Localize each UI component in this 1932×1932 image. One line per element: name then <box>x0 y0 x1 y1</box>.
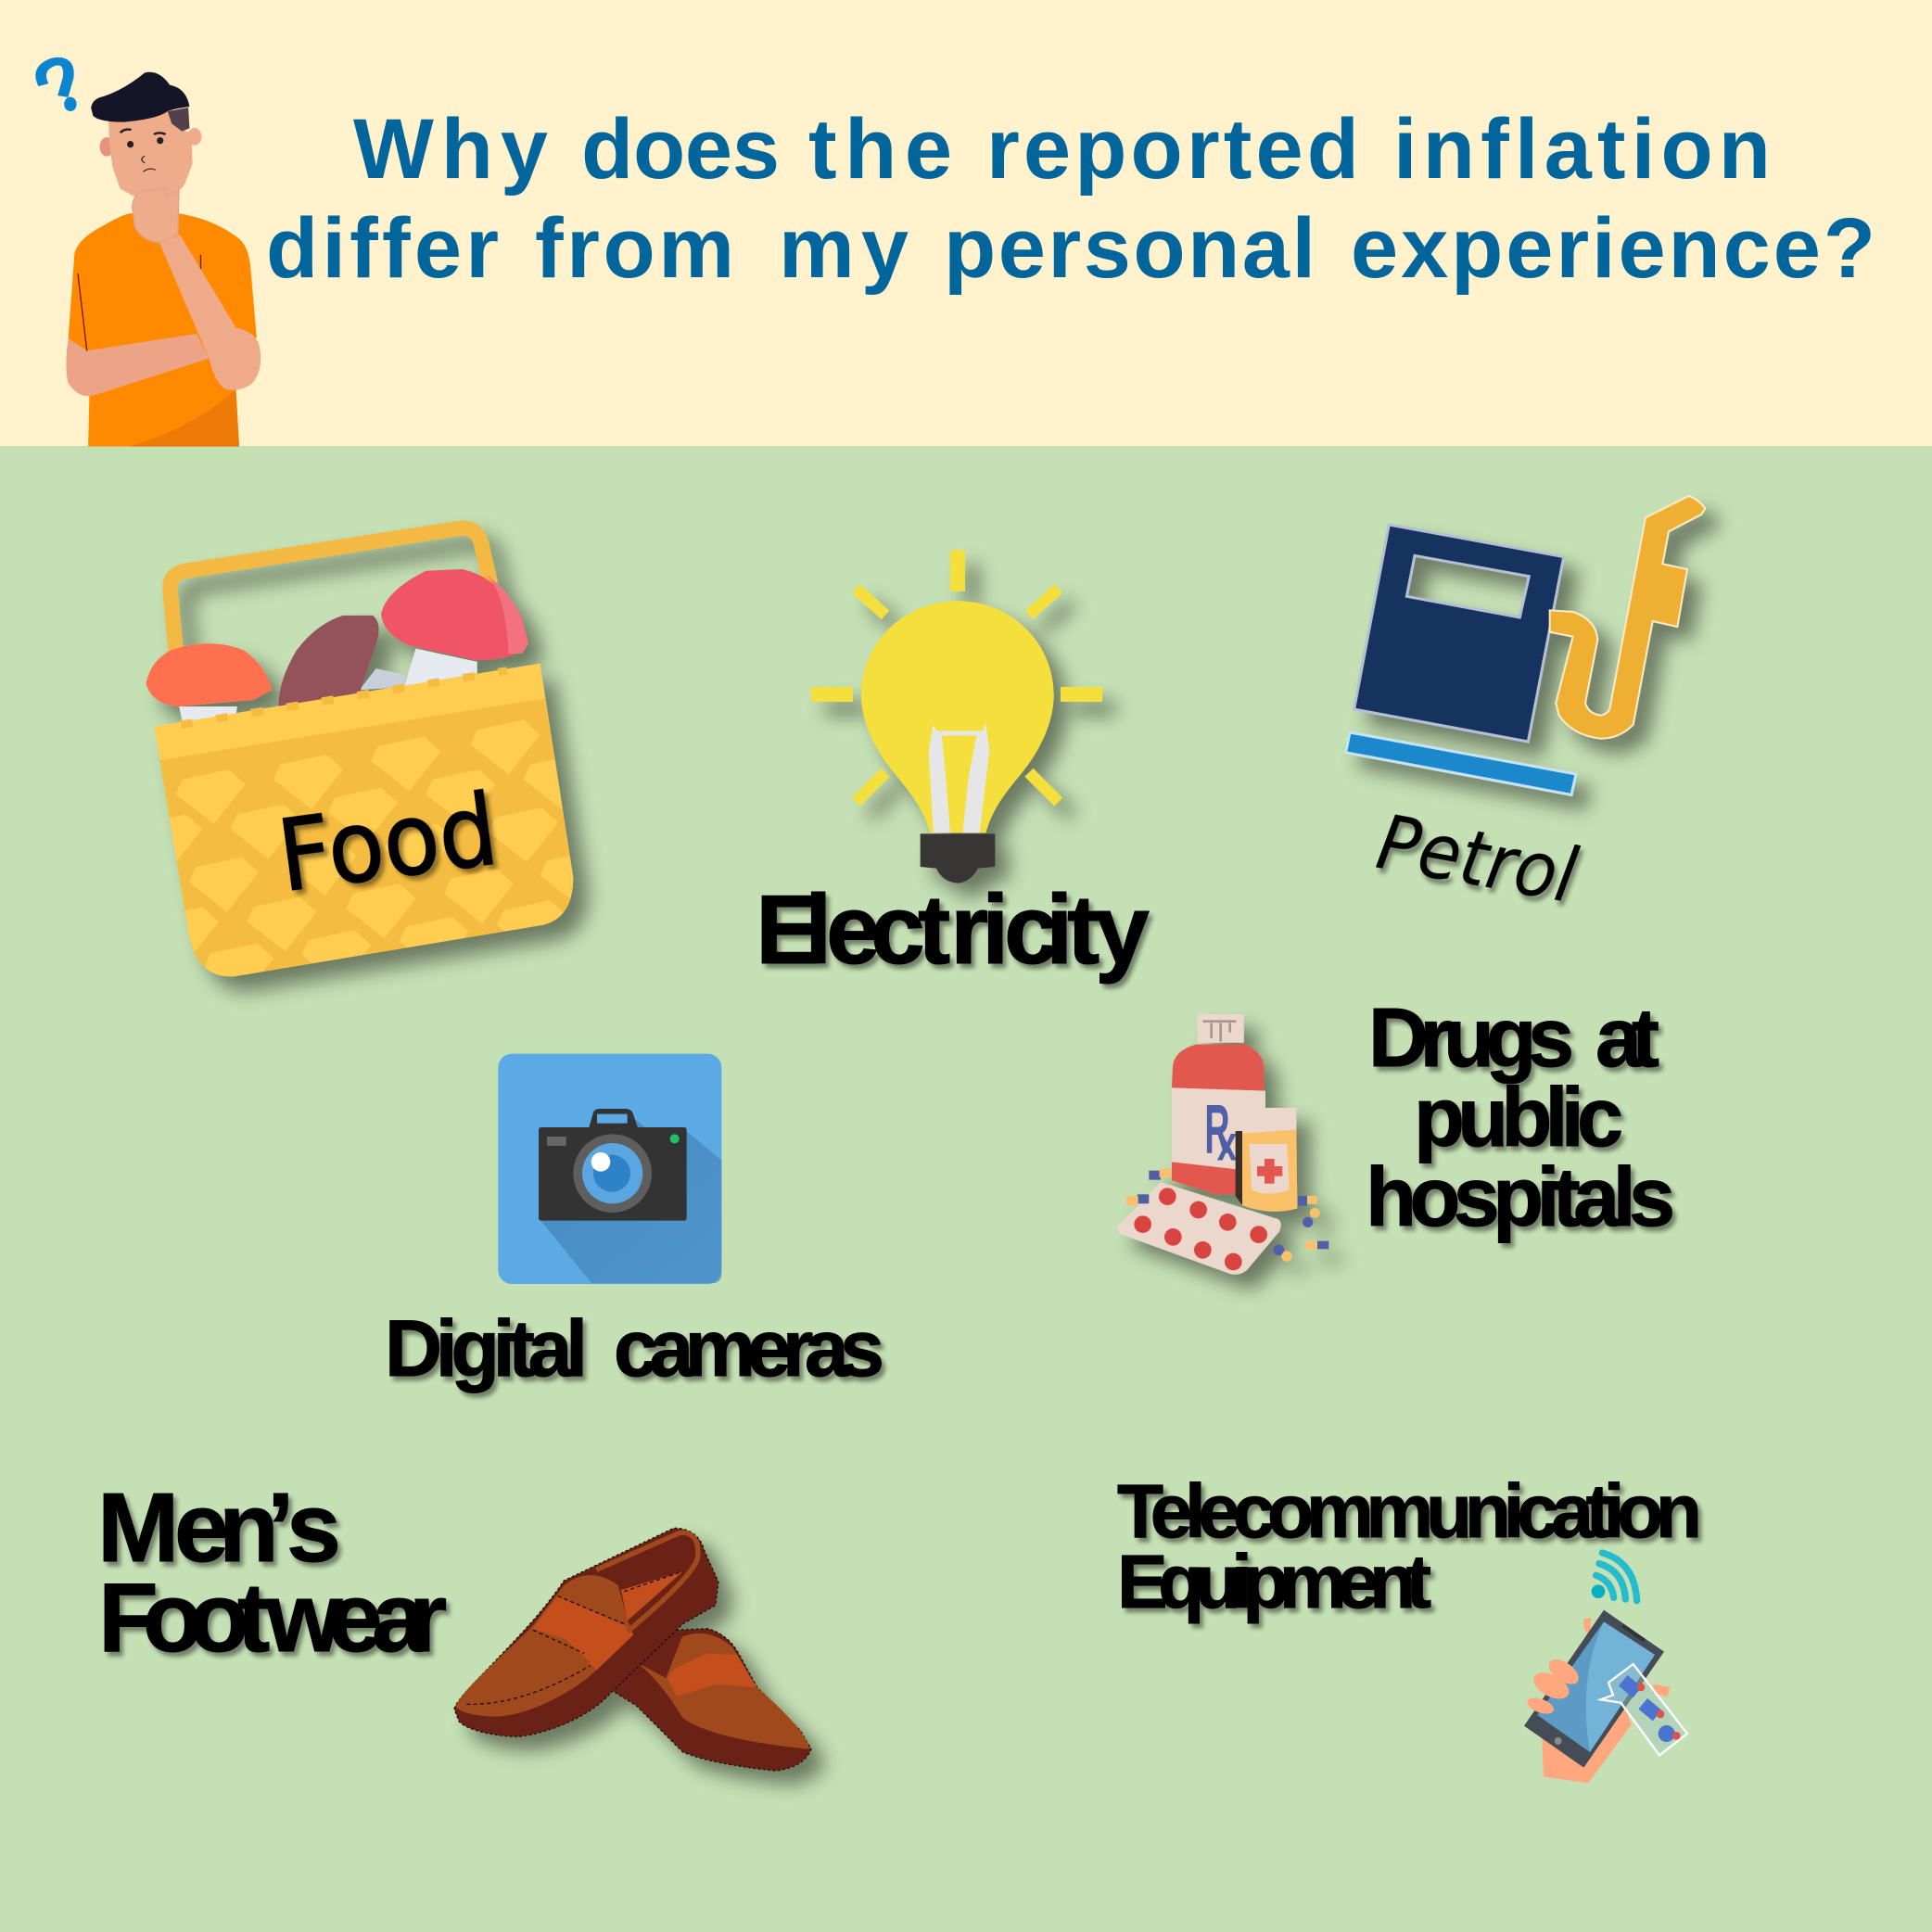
icon: medicines: R <box>1204 1089 1230 1168</box>
title: personal <box>944 201 1316 296</box>
lower background <box>0 446 1932 1932</box>
icon: light bulb <box>811 550 1102 883</box>
title: Why <box>353 102 548 197</box>
label: Men's Footwear <box>97 1473 447 1672</box>
label: Drugs at public hospitals: Drugs <box>1368 992 1574 1085</box>
label: Men's Footwear: Men’s <box>97 1473 341 1582</box>
label: Men's Footwear: Footwear <box>98 1563 447 1672</box>
label: Drugs at public hospitals: at <box>1595 992 1659 1085</box>
label: Telecommunication Equipment: Telecommunication <box>1117 1469 1702 1554</box>
label: Drugs at public hospitals <box>1366 992 1675 1244</box>
icon: medicines: x <box>1217 1116 1237 1171</box>
label: Drugs at public hospitals: public <box>1414 1072 1623 1164</box>
icon: camera app tile <box>498 1054 721 1284</box>
icon: medicines <box>1117 1014 1328 1275</box>
label: Drugs at public hospitals: hospitals <box>1366 1151 1675 1244</box>
header background <box>0 0 1932 446</box>
icon: food basket <box>133 528 609 998</box>
title: reported <box>986 102 1359 197</box>
icon: thinking man <box>41 61 261 447</box>
icon: loafers <box>454 1528 811 1771</box>
title <box>266 102 1875 296</box>
label: Digital cameras: cameras <box>614 1304 884 1393</box>
icon: phone with wifi <box>1524 1553 1687 1783</box>
title: my <box>779 201 909 296</box>
icon: petrol pump <box>1346 496 1705 794</box>
title: the <box>808 102 952 197</box>
label: Digital cameras: Digital <box>385 1304 588 1393</box>
title: inflation <box>1393 102 1771 197</box>
title: from <box>535 201 734 296</box>
label: Food: Food <box>272 772 503 914</box>
label: Digital cameras <box>385 1304 884 1393</box>
label: Electricity: Electricity <box>756 875 1150 985</box>
label: Petrol: Petrol <box>1370 798 1583 921</box>
title: differ <box>266 201 499 296</box>
label: Telecommunication Equipment: Equipment <box>1117 1540 1431 1624</box>
title: does <box>581 102 780 197</box>
title: experience? <box>1351 201 1875 296</box>
label: Telecommunication Equipment <box>1117 1469 1702 1624</box>
